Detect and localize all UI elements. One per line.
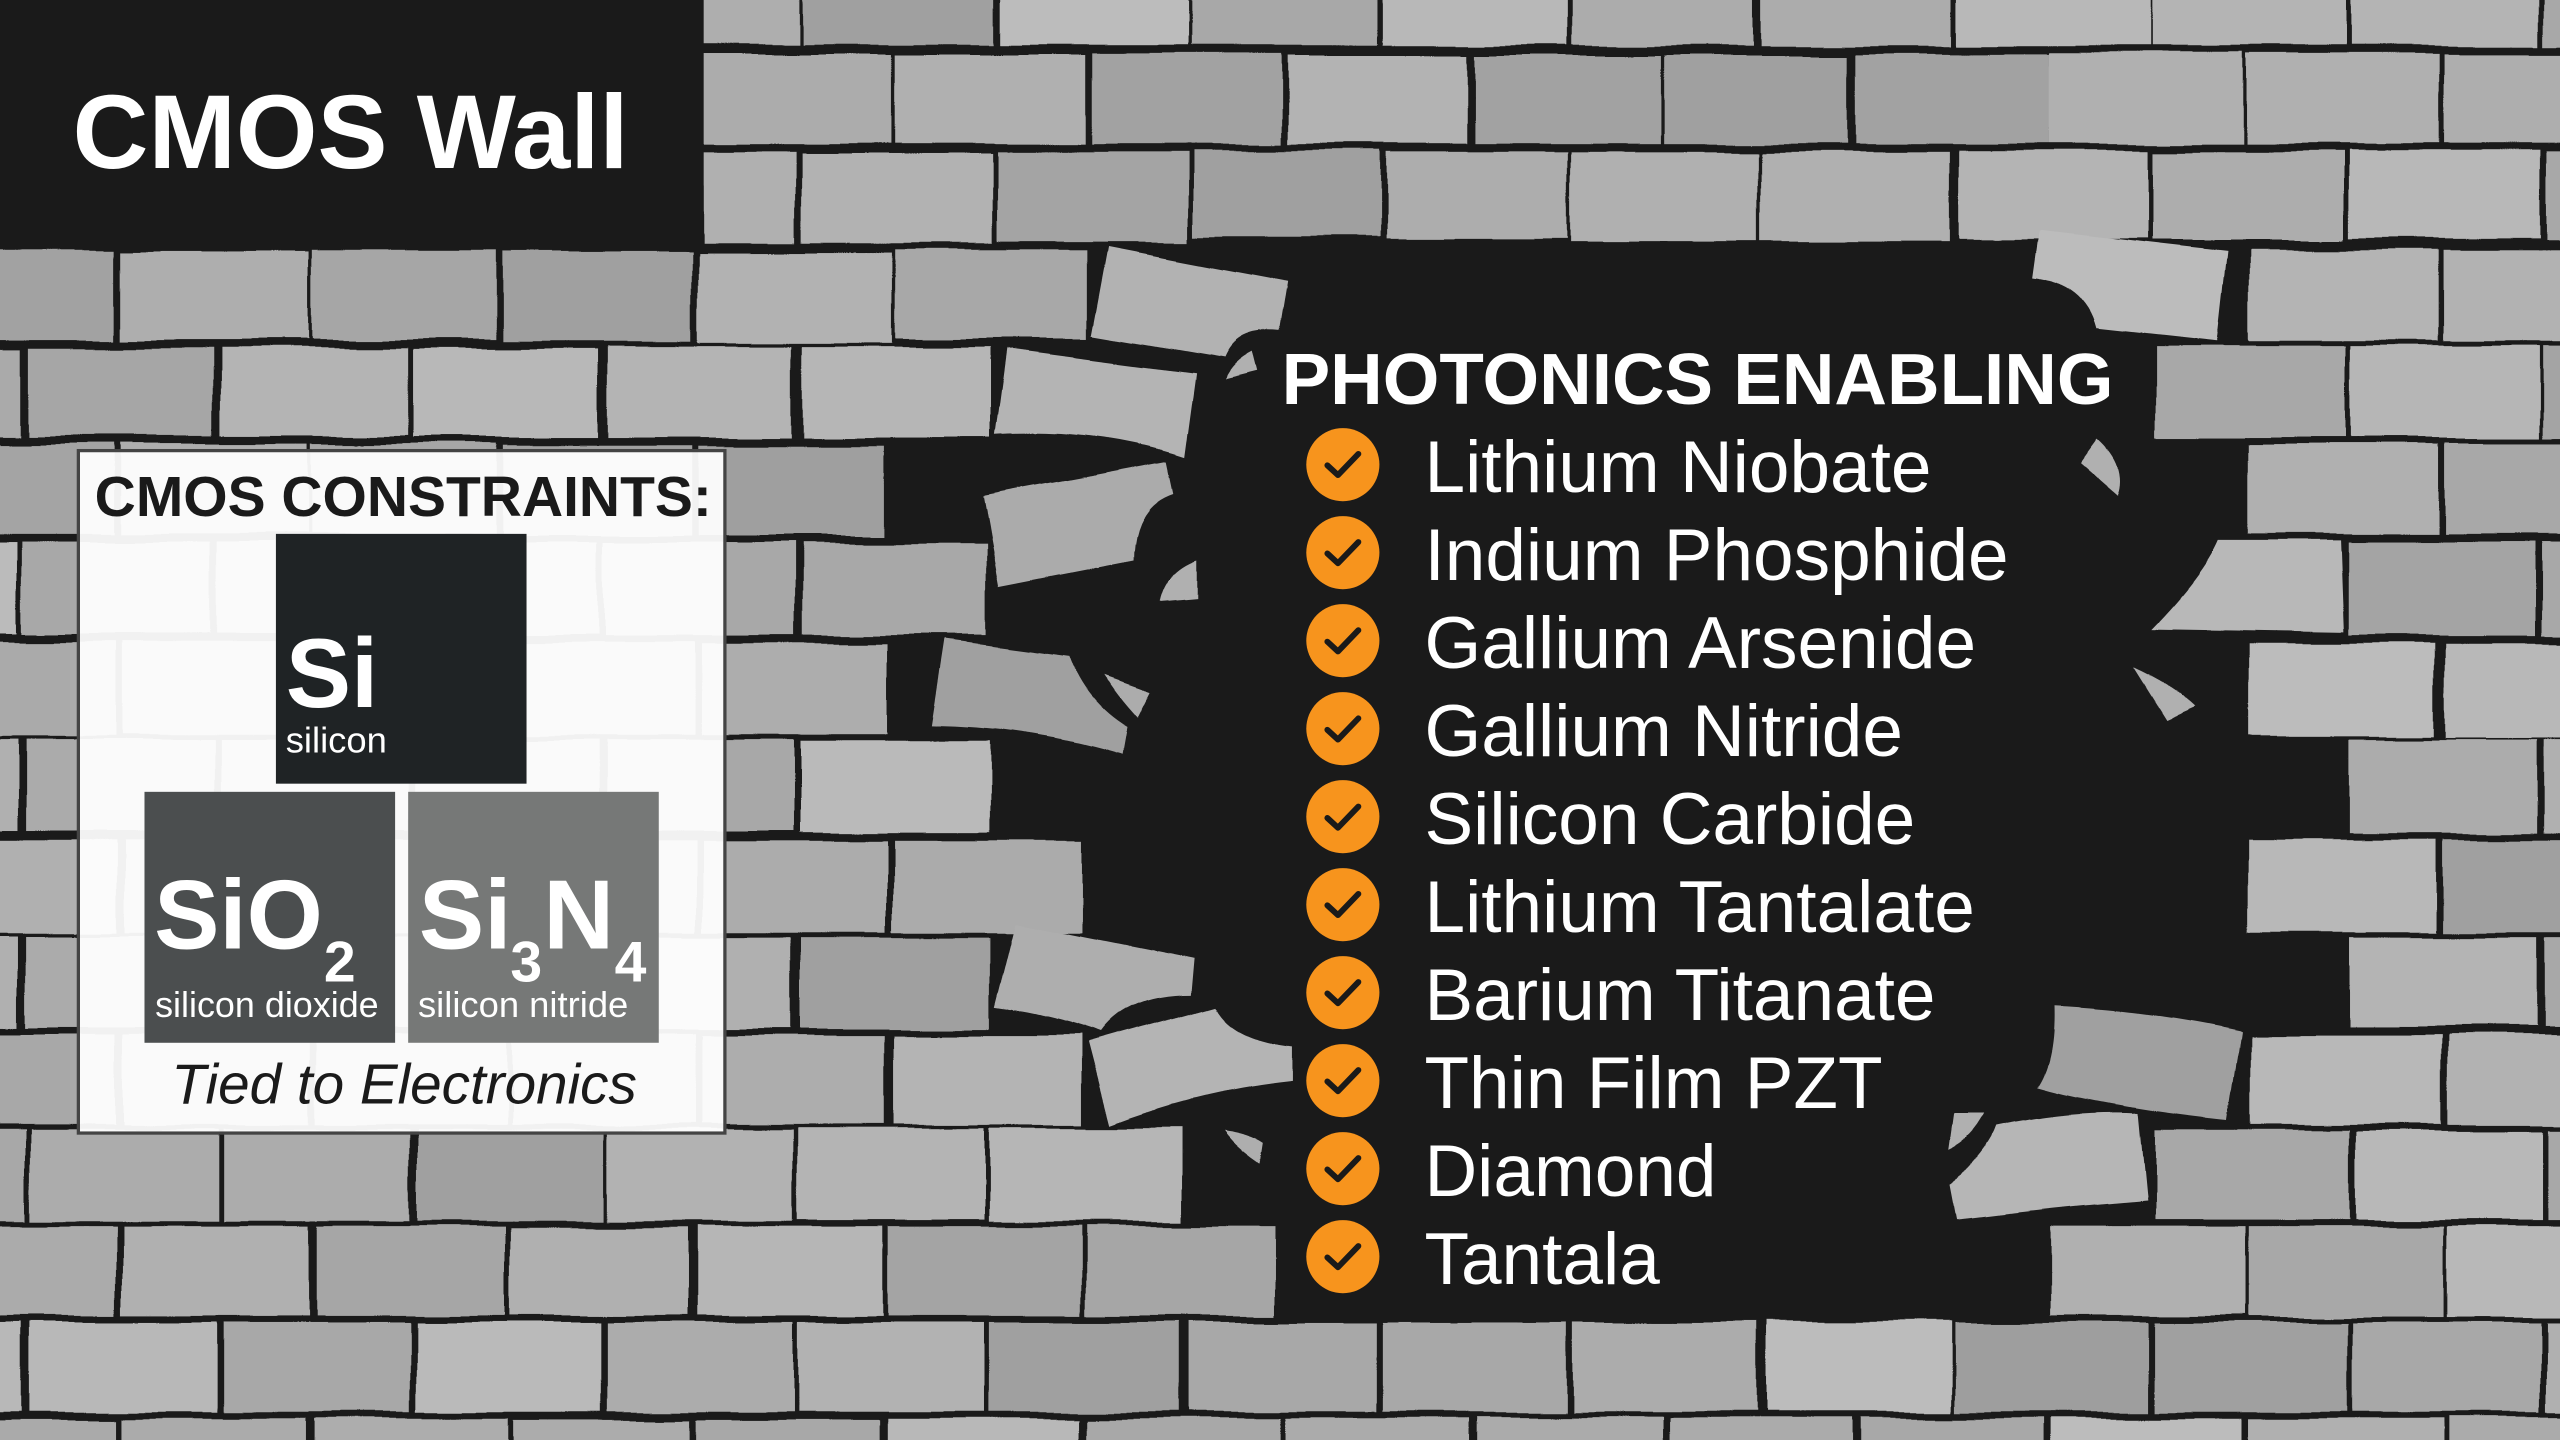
heading: photonics enabling: PHOTONICS ENABLING [1282,339,2113,420]
brick fragments upper hole [1105,353,2194,720]
brick row 5 [0,442,2560,586]
element tile: silicon [276,534,527,784]
brick row 9 [0,839,2560,932]
element tile: silicon nitride: Si [419,860,511,970]
item: Tantala: Tantala [1424,1219,1660,1300]
checklist: materials [1306,427,2009,1300]
item: Barium Titanate: Barium Titanate [1424,955,1936,1036]
item: Indium Phosphide: Indium Phosphide [1424,515,2009,596]
brick row 6 [0,540,2560,635]
element tile: silicon nitride [408,792,659,1043]
element tile: silicon: Si [286,618,378,728]
element tile: silicon nitride: N [543,860,614,970]
element tile: silicon dioxide: SiO [154,860,323,970]
heading: CMOS constraints: CMOS CONSTRAINTS: [95,465,712,529]
panel: CMOS constraints [78,451,725,1133]
brick row 13 [0,1226,2560,1318]
brick fragments lower hole [1224,1113,1984,1164]
caption: tied to electronics: Tied to Electronics [171,1054,637,1117]
item: Lithium Niobate: Lithium Niobate [1424,427,1932,508]
brick row 4 [0,346,2560,457]
item: Thin Film PZT: Thin Film PZT [1424,1043,1883,1124]
brick row 3 [0,230,2560,358]
element tile: silicon dioxide [144,792,395,1043]
title block [0,0,704,248]
brick row 7 [0,640,2560,754]
brick row 8 [0,740,2560,833]
element tile: silicon dioxide: 2 [324,931,356,995]
element tile: silicon: silicon [286,720,387,761]
element tile: silicon nitride: silicon nitride [418,984,628,1025]
brick row 11 [0,1006,2560,1125]
element tile: silicon nitride: 4 [615,931,647,995]
brick row 12 [0,1113,2560,1221]
item: Tantala [1306,1219,1660,1300]
item: Gallium Arsenide: Gallium Arsenide [1424,603,1976,684]
title: CMOS Wall [73,74,629,191]
item: Gallium Nitride: Gallium Nitride [1424,691,1903,772]
item: Silicon Carbide: Silicon Carbide [1424,779,1915,860]
item: Lithium Tantalate: Lithium Tantalate [1424,867,1975,948]
brick row 1 [704,52,2560,144]
brick row 15 [0,1417,2560,1440]
item: Diamond: Diamond [1424,1131,1717,1212]
element tile: silicon nitride: 3 [510,931,542,995]
element tile: silicon dioxide: silicon dioxide [155,984,379,1025]
brick row 0 [704,0,2560,46]
brick row 2 [704,150,2560,243]
brick row 10 [0,922,2560,1033]
brick row 14 [0,1321,2560,1412]
